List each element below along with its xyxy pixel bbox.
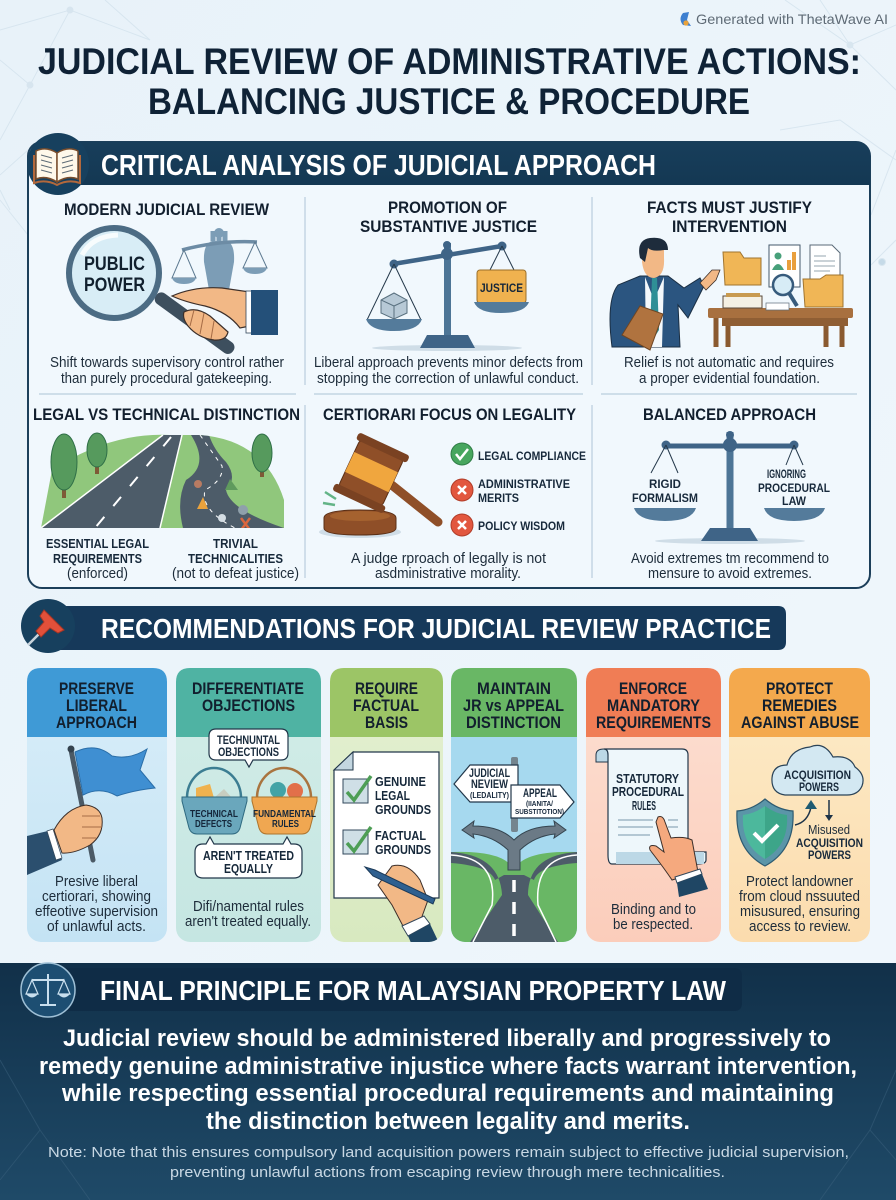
block: promotion of substantive justice: SUBSTANTIVE JUSTICE xyxy=(360,217,537,236)
icon: checklist document: LEGAL xyxy=(375,788,410,803)
sign: appeal: (IIANITA/ xyxy=(526,801,553,808)
icon: red pushpin xyxy=(21,599,75,653)
block: balanced approach: BALANCED APPROACH xyxy=(643,405,816,424)
icon: tilted scale xyxy=(366,241,529,351)
card: protect remedies against abuse: AGAINST ABUSE xyxy=(741,713,859,732)
title xyxy=(38,41,861,122)
icon: shield with check xyxy=(737,799,793,866)
block: promotion of substantive justice: Liberal approach prevents minor defects from xyxy=(314,355,583,371)
card: protect remedies against abuse xyxy=(729,668,870,942)
block: balanced approach: mensure to avoid extremes. xyxy=(648,566,812,582)
icon: orange basket xyxy=(252,768,317,834)
label: misused acquisition powers xyxy=(796,823,863,862)
card: preserve liberal approach: of unlawful acts. xyxy=(47,919,146,935)
main statement: remedy genuine administrative injustice where facts warrant intervention, xyxy=(39,1053,857,1080)
card: protect remedies against abuse: Protect landowner xyxy=(746,874,853,890)
block: legal vs technical distinction: (not to defeat justice) xyxy=(172,566,299,582)
block: legal vs technical distinction: LEGAL VS TECHNICAL DISTINCTION xyxy=(33,405,300,424)
card: enforce mandatory requirements: be respected. xyxy=(613,917,693,933)
block: facts must justify intervention xyxy=(610,198,853,387)
card: protect remedies against abuse: REMEDIES xyxy=(762,696,837,715)
block: certiorari focus on legality: A judge rproach of legally is not xyxy=(351,551,546,567)
card: enforce mandatory requirements: MANDATORY xyxy=(607,696,701,715)
checklist: legal compliance, merits, policy: POLICY WISDOM xyxy=(478,521,565,533)
card: protect remedies against abuse: PROTECT xyxy=(766,679,833,698)
section header: recommendations: RECOMMENDATIONS FOR JUDICIAL REVIEW PRACTICE xyxy=(101,613,771,644)
icon: hand writing with pen xyxy=(365,865,440,945)
block: certiorari focus on legality: asdministrative morality. xyxy=(375,566,521,582)
card: differentiate objections xyxy=(176,668,321,942)
section header bar: CRITICAL ANALYSIS OF JUDICIAL APPROACH xyxy=(101,150,656,182)
main statement: the distinction between legality and merits. xyxy=(206,1108,690,1135)
card: preserve liberal approach: effeotive supervision xyxy=(35,904,158,920)
icon: lawyer figure xyxy=(610,238,720,350)
icon: cloud: ACQUISITION xyxy=(784,770,851,782)
block: balanced approach: FORMALISM xyxy=(632,493,698,505)
main statement: while respecting essential procedural requirements and maintaining xyxy=(61,1080,834,1107)
block: facts must justify intervention: FACTS MUST JUSTIFY xyxy=(647,198,813,217)
watermark: Generated with ThetaWave AI: Generated with ThetaWave AI xyxy=(696,11,888,27)
icon: tilted scale: JUSTICE xyxy=(480,283,523,295)
icon: orange basket: FUNDAMENTAL xyxy=(253,809,316,820)
block: promotion of substantive justice xyxy=(314,198,583,387)
card: differentiate objections: aren't treated equally. xyxy=(185,914,311,930)
card: maintain jr vs appeal distinction: JR vs APPEAL xyxy=(463,696,564,715)
card: maintain jr vs appeal distinction: MAINTAIN xyxy=(477,679,551,698)
card: preserve liberal approach xyxy=(27,668,167,942)
block: balanced approach: IGNORING xyxy=(767,469,806,481)
section header bar xyxy=(70,142,870,185)
callout: technical objections xyxy=(209,729,288,767)
block: modern judicial review: Shift towards supervisory control rather xyxy=(50,355,284,371)
card: maintain jr vs appeal distinction: DISTINCTION xyxy=(466,713,561,732)
block: facts must justify intervention: a proper evidential foundation. xyxy=(639,371,820,387)
card: enforce mandatory requirements: ENFORCE xyxy=(619,679,687,698)
checklist: legal compliance, merits, policy xyxy=(451,443,586,536)
icon: gavel xyxy=(319,432,438,538)
card: preserve liberal approach: PRESERVE xyxy=(59,679,134,698)
callout: aren't treated equally xyxy=(195,837,302,878)
card: require factual basis: REQUIRE xyxy=(355,679,418,698)
block: certiorari focus on legality: CERTIORARI FOCUS ON LEGALITY xyxy=(323,405,577,424)
card: enforce mandatory requirements: REQUIREMENTS xyxy=(596,713,711,732)
icon: checklist document xyxy=(334,752,439,898)
block: modern judicial review: MODERN JUDICIAL REVIEW xyxy=(64,200,270,219)
icon: pointing hand xyxy=(650,817,708,897)
illustration: forked road xyxy=(451,757,577,942)
block: balanced approach xyxy=(631,405,830,582)
block: modern judicial review xyxy=(50,200,284,387)
block: balanced approach: RIGID xyxy=(649,479,681,491)
sign: judicial review: (LEDALITY) xyxy=(470,790,509,800)
block: certiorari focus on legality xyxy=(319,405,586,582)
checklist: legal compliance, merits, policy: ADMINISTRATIVE xyxy=(478,479,570,491)
icon: orange basket: RULES xyxy=(272,819,299,830)
icon: statute scroll xyxy=(596,749,706,864)
checklist: legal compliance, merits, policy: LEGAL COMPLIANCE xyxy=(478,451,586,463)
note: preventing unlawful actions from escaping review through mere technicalities. xyxy=(170,1164,725,1181)
card: enforce mandatory requirements: Binding and to xyxy=(611,902,696,918)
icon: checklist document: GROUNDS xyxy=(375,802,431,817)
panel: critical analysis xyxy=(27,133,870,588)
block: balanced approach: Avoid extremes tm recommend to xyxy=(631,551,829,567)
callout: technical objections: OBJECTIONS xyxy=(218,747,279,759)
icon: checklist document: GENUINE xyxy=(375,774,426,789)
icon: scales in circle xyxy=(21,963,75,1017)
block: legal vs technical distinction: (enforced) xyxy=(67,566,128,582)
icon: teal basket: TECHNICAL xyxy=(190,809,238,820)
card: preserve liberal approach: Presive liberal xyxy=(55,874,138,890)
icon: magnifier: PUBLIC xyxy=(84,254,145,275)
note: Note: Note that this ensures compulsory land acquisition powers remain subject to effective judicial supervision, xyxy=(48,1144,849,1161)
arrows: shield to cloud, cloud to misuse xyxy=(795,800,833,825)
card: preserve liberal approach: certiorari, showing xyxy=(42,889,151,905)
card: protect remedies against abuse: from cloud nssuuted xyxy=(739,889,860,905)
sign: judicial review: NEVIEW xyxy=(471,779,508,791)
callout: aren't treated equally: EQUALLY xyxy=(224,861,273,876)
card: differentiate objections: DIFFERENTIATE xyxy=(192,679,304,698)
block: facts must justify intervention: INTERVENTION xyxy=(672,217,787,236)
card: require factual basis: FACTUAL xyxy=(353,696,419,715)
block: legal vs technical distinction: TRIVIAL xyxy=(213,536,258,551)
block: balanced approach: PROCEDURAL xyxy=(758,483,830,495)
card: protect remedies against abuse: access to review. xyxy=(749,919,851,935)
icon: magnifier xyxy=(69,228,237,356)
icon: hand holding flag xyxy=(27,746,155,875)
icon: open book xyxy=(27,133,89,195)
callout: technical objections: TECHNUNTAL xyxy=(217,735,280,747)
icon: scales with fist xyxy=(172,228,267,290)
section header bar: FINAL PRINCIPLE FOR MALAYSIAN PROPERTY LAW xyxy=(100,975,727,1006)
block: promotion of substantive justice: PROMOTION OF xyxy=(388,198,507,217)
main statement: Judicial review should be administered liberally and progressively to xyxy=(63,1025,831,1052)
card: preserve liberal approach: APPROACH xyxy=(56,713,137,732)
card: preserve liberal approach: LIBERAL xyxy=(66,696,127,715)
sign: appeal xyxy=(511,785,574,818)
block: legal vs technical distinction: ESSENTIAL LEGAL xyxy=(46,536,149,551)
panel: final principle xyxy=(0,963,896,1200)
block: promotion of substantive justice: stopping the correction of unlawful conduct. xyxy=(317,371,579,387)
sign: appeal: SUBSTITOTION) xyxy=(515,807,564,816)
block: balanced approach: LAW xyxy=(782,496,806,508)
checklist: legal compliance, merits, policy: MERITS xyxy=(478,493,519,505)
label: misused acquisition powers: POWERS xyxy=(808,850,851,862)
block: legal vs technical distinction: REQUIREMENTS xyxy=(53,551,142,566)
icon: statute scroll: PROCEDURAL xyxy=(612,784,684,799)
section header: recommendations xyxy=(21,599,786,653)
icon: level scale xyxy=(634,431,825,544)
block: legal vs technical distinction xyxy=(33,405,300,582)
card: differentiate objections: OBJECTIONS xyxy=(202,696,295,715)
icon: cloud: POWERS xyxy=(799,782,839,794)
card: require factual basis: BASIS xyxy=(365,713,408,732)
card: enforce mandatory requirements xyxy=(586,668,721,942)
callout: aren't treated equally: AREN'T TREATED xyxy=(203,848,294,863)
icon: checklist document: FACTUAL xyxy=(375,828,426,843)
main statement xyxy=(39,1025,857,1135)
icon: statute scroll: STATUTORY xyxy=(616,771,679,786)
section header bar xyxy=(60,968,742,1011)
label: misused acquisition powers: Misused xyxy=(808,823,850,837)
sign: judicial review: JUDICIAL xyxy=(469,768,510,780)
icon: desk with files xyxy=(708,245,853,347)
label: misused acquisition powers: ACQUISITION xyxy=(796,838,863,850)
card: require factual basis xyxy=(330,668,443,945)
illustration: straight road and winding road xyxy=(41,432,284,530)
title: BALANCING JUSTICE & PROCEDURE xyxy=(148,81,750,122)
icon: cloud xyxy=(772,745,863,795)
icon: statute scroll: RULES xyxy=(632,798,656,813)
sign: judicial review xyxy=(454,765,518,802)
card: differentiate objections: Difi/namental rules xyxy=(193,899,304,915)
card: maintain jr vs appeal distinction xyxy=(451,668,577,942)
icon: hand and sleeve xyxy=(172,288,278,340)
card: protect remedies against abuse: misusured, ensuring xyxy=(740,904,860,920)
icon: checklist document: GROUNDS xyxy=(375,842,431,857)
sign: appeal: APPEAL xyxy=(523,788,557,800)
icon: teal basket: DEFECTS xyxy=(195,819,232,830)
icon: magnifier: POWER xyxy=(84,275,145,296)
block: modern judicial review: than purely procedural gatekeeping. xyxy=(61,371,272,387)
icon: teal basket xyxy=(182,768,247,834)
note xyxy=(48,1144,849,1181)
block: legal vs technical distinction: TECHNICALITIES xyxy=(188,551,283,566)
block: facts must justify intervention: Relief is not automatic and requires xyxy=(624,355,834,371)
